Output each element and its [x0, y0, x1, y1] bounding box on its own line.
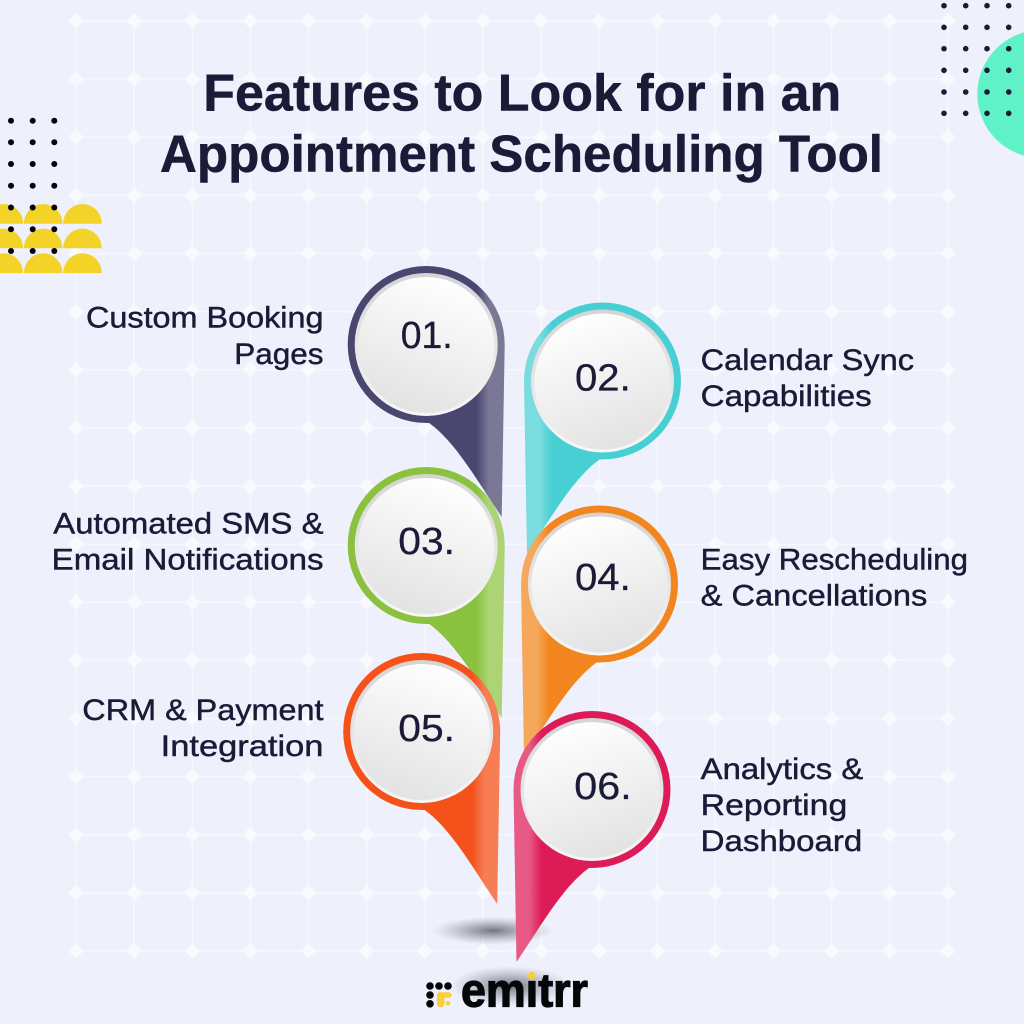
logo wordmark: emitrr — [461, 964, 588, 1017]
label: analytics and reporting dashboard — [701, 753, 863, 858]
pin 01: 01. — [401, 315, 453, 357]
label: custom booking pages — [86, 301, 324, 371]
label: automated sms and email notifications: Email Notifications — [52, 543, 323, 576]
title: Features to Look for in an — [203, 65, 841, 123]
decoration: yellow semicircles — [0, 204, 102, 273]
pin 05: 05. — [398, 708, 455, 750]
title — [160, 65, 883, 184]
label: easy rescheduling and cancellations: & Cancellations — [701, 579, 927, 612]
logo icon — [426, 982, 452, 1008]
label: analytics and reporting dashboard: Reporting — [701, 789, 847, 822]
label: automated sms and email notifications: Automated SMS & — [53, 507, 324, 540]
label: calendar sync capabilities — [701, 344, 914, 413]
pin 03 — [348, 467, 505, 718]
label: crm and payment integration: Integration — [161, 730, 324, 763]
label: custom booking pages: Custom Booking — [86, 301, 324, 334]
pin 02 — [524, 302, 681, 554]
label: easy rescheduling and cancellations: Easy Rescheduling — [701, 543, 968, 576]
pin 01 — [348, 266, 505, 517]
label: easy rescheduling and cancellations — [701, 543, 968, 612]
pin 05 — [343, 653, 500, 904]
pin 03: 03. — [398, 521, 455, 563]
decoration: mint circle — [977, 30, 1024, 158]
label: calendar sync capabilities: Calendar Sync — [701, 344, 914, 377]
logo yellow dot — [528, 972, 536, 980]
ground shadow under pins — [433, 917, 553, 945]
logo: emitrr — [426, 972, 588, 1008]
label: calendar sync capabilities: Capabilities — [701, 380, 872, 413]
label: crm and payment integration — [82, 694, 324, 763]
pin 06 — [514, 711, 670, 962]
pin 04 — [521, 506, 678, 756]
logo shadow — [450, 966, 570, 1006]
pin 02: 02. — [575, 358, 631, 400]
label: custom booking pages: Pages — [234, 338, 324, 371]
label: analytics and reporting dashboard: Analytics & — [701, 753, 863, 786]
decoration: top-right dot grid — [941, 3, 1012, 116]
pin 06: 06. — [574, 766, 632, 808]
decoration: left dot grid — [8, 118, 57, 254]
pin 04: 04. — [575, 557, 631, 599]
label: analytics and reporting dashboard: Dashboard — [701, 825, 862, 858]
label: automated sms and email notifications — [52, 507, 323, 576]
title: Appointment Scheduling Tool — [160, 126, 883, 184]
label: crm and payment integration: CRM & Payment — [82, 694, 324, 727]
